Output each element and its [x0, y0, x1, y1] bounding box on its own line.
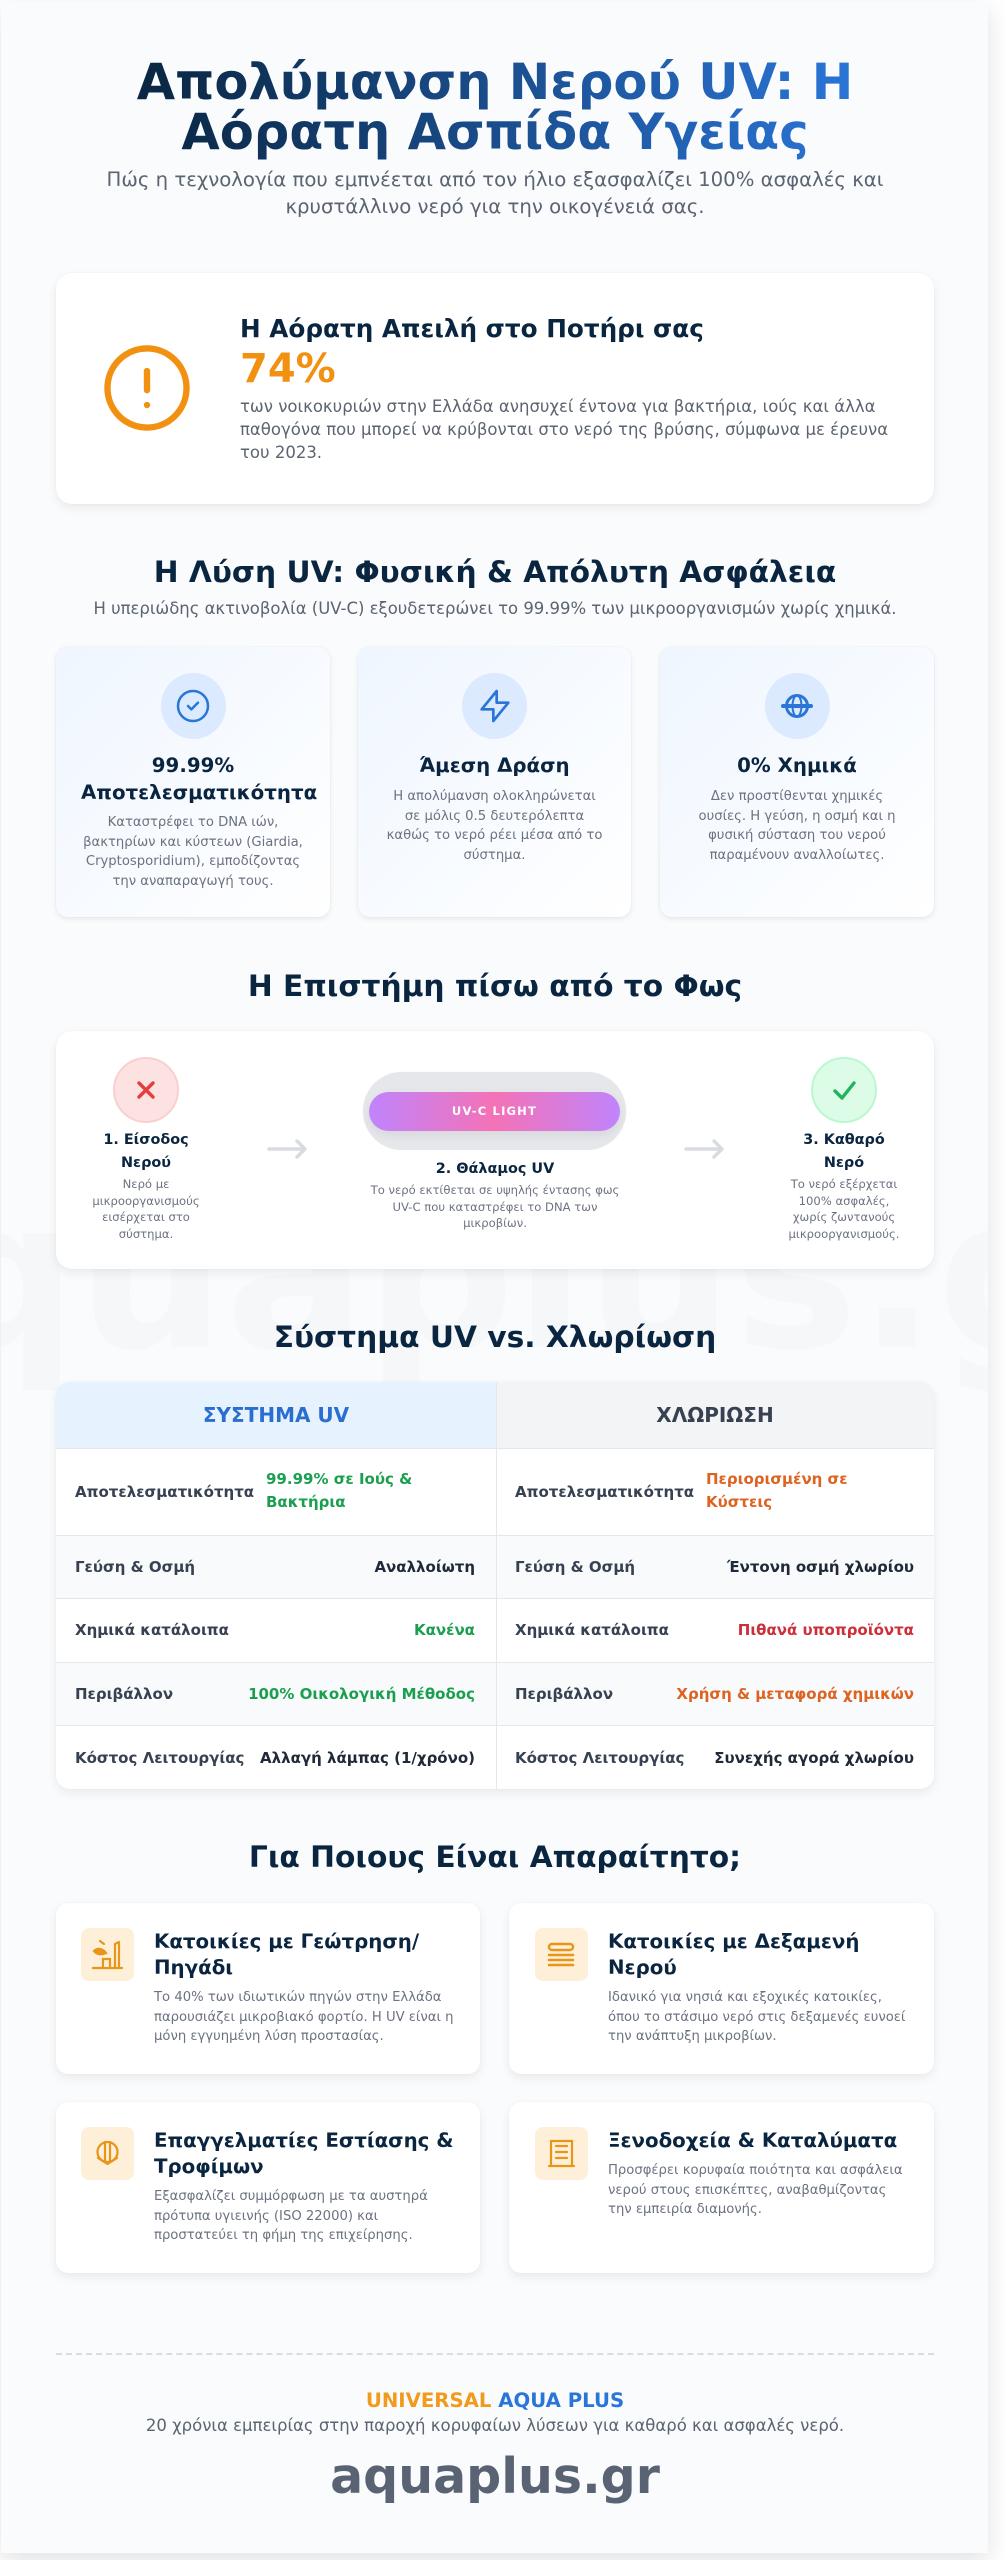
step text: μικροβίων.: [463, 1216, 527, 1230]
card text: [699, 789, 895, 863]
panel: effectiveness: [56, 647, 330, 917]
row: residues: Πιθανά υποπροϊόντα: [738, 1621, 914, 1639]
row: cost: [56, 1725, 934, 1789]
card text: φυσική σύσταση του νερού: [708, 828, 886, 843]
step text: 100% ασφαλές,: [799, 1194, 889, 1208]
comparison table: [56, 1382, 934, 1789]
icon: globe: [764, 673, 830, 739]
card text: Cryptosporidium), εμποδίζοντας: [86, 854, 300, 869]
column divider: [496, 1382, 497, 1789]
threat statistic: 74%: [240, 346, 336, 392]
row: effectiveness: Αποτελεσματικότητα: [515, 1483, 694, 1501]
icon: check circle: [160, 673, 226, 739]
uv lamp: UV-C LIGHT: [452, 1104, 537, 1118]
panel: zero chemicals: [660, 647, 934, 917]
card heading: Κατοικίες με Δεξαμενή: [608, 1930, 859, 1953]
step text: εισέρχεται στο: [102, 1210, 190, 1224]
card text: [608, 1990, 906, 2044]
row: effectiveness: [56, 1448, 934, 1535]
icon: cross: [113, 1057, 179, 1123]
step text: Το νερό εκτίθεται σε υψηλής έντασης φως: [371, 1183, 619, 1197]
subtitle: κρυστάλλινο νερό για την οικογένειά σας.: [285, 195, 705, 218]
step title: 1. Είσοδος: [103, 1132, 189, 1148]
card text: πρότυπα υγιεινής (ISO 22000) και: [154, 2209, 378, 2224]
subtitle: Πώς η τεχνολογία που εμπνέεται από τον ήλιο εξασφαλίζει 100% ασφαλές και: [107, 168, 883, 191]
row: residues: Κανένα: [414, 1621, 475, 1639]
step text: χωρίς ζωντανούς: [793, 1210, 895, 1224]
solution subtitle: Η υπεριώδης ακτινοβολία (UV-C) εξουδετερώνει το 99.99% των μικροοργανισμών χωρίς χημικά.: [93, 599, 897, 618]
row: cost: Κόστος Λειτουργίας: [75, 1749, 244, 1767]
card text: βακτηρίων και κύστεων (Giardia,: [83, 835, 303, 850]
step text: [370, 1183, 619, 1230]
uv lamp: [369, 1092, 620, 1131]
panel: threat: [56, 273, 934, 504]
card text: καθώς το νερό ρέει μέσα από το: [387, 828, 602, 843]
row: taste: [56, 1535, 934, 1598]
threat text: του 2023.: [240, 443, 322, 462]
step text: σύστημα.: [119, 1226, 173, 1240]
step text: μικροοργανισμούς: [92, 1194, 200, 1208]
icon: hotel: [535, 2127, 588, 2180]
card text: [608, 2163, 903, 2217]
card text: Δεν προστίθενται χημικές: [711, 789, 883, 804]
threat text: παθογόνα που μπορεί να κρύβονται στο νερό της βρύσης, σύμφωνα με έρευνα: [240, 420, 888, 439]
row: residues: Χημικά κατάλοιπα: [515, 1621, 669, 1639]
row: environment: [56, 1662, 934, 1725]
title: [137, 53, 853, 161]
footer website: aquaplus.gr: [330, 2448, 660, 2505]
row: cost: Συνεχής αγορά χλωρίου: [714, 1749, 914, 1767]
icon: warning: [104, 345, 190, 431]
card text: όπου το στάσιμο νερό στις δεξαμενές ευνοεί: [608, 2010, 905, 2025]
card text: [154, 2189, 428, 2243]
header: uv: [56, 1382, 496, 1448]
footer brand: UNIVERSAL AQUA PLUS: [366, 2389, 624, 2412]
icon: food: [81, 2127, 134, 2180]
card text: Καταστρέφει το DNA ιών,: [108, 815, 278, 830]
card text: [83, 815, 303, 889]
row: taste: Έντονη οσμή χλωρίου: [727, 1558, 914, 1576]
panel: hotels: [509, 2102, 934, 2273]
card text: νερού στους επισκέπτες, αναβαθμίζοντας: [608, 2183, 886, 2198]
footer divider: [56, 2353, 934, 2355]
card text: Ιδανικό για νησιά και εξοχικές κατοικίες,: [608, 1990, 882, 2005]
step 1: [92, 1057, 200, 1240]
card heading: [154, 2129, 454, 2178]
card heading: Επαγγελματίες Εστίασης &: [154, 2129, 454, 2152]
card text: [154, 1990, 453, 2044]
step 2: [363, 1072, 626, 1230]
row: environment: Περιβάλλον: [515, 1685, 613, 1703]
step title: [103, 1132, 189, 1171]
step title: 2. Θάλαμος UV: [436, 1161, 554, 1177]
card heading: 0% Χημικά: [737, 754, 857, 777]
threat text: των νοικοκυριών στην Ελλάδα ανησυχεί έντονα για βακτήρια, ιούς και άλλα: [240, 397, 876, 416]
card text: παραμένουν αναλλοίωτες.: [710, 848, 884, 863]
threat text: [240, 397, 888, 462]
icon: well: [81, 1928, 134, 1981]
card heading: Νερού: [608, 1956, 677, 1979]
panel: instant action: [358, 647, 631, 917]
heading: science: Η Επιστήμη πίσω από το Φως: [248, 969, 742, 1004]
icon: tank: [535, 1928, 588, 1981]
card text: την ανάπτυξη μικροβίων.: [608, 2029, 777, 2044]
row: residues: [56, 1598, 934, 1662]
card text: Η απολύμανση ολοκληρώνεται: [393, 789, 596, 804]
card heading: Αποτελεσματικότητα: [81, 781, 317, 804]
header: uv: ΣΥΣΤΗΜΑ UV: [203, 1403, 349, 1427]
card text: Το 40% των ιδιωτικών πηγών στην Ελλάδα: [154, 1990, 442, 2005]
header: chlorine: [496, 1382, 934, 1448]
step title: Νερό: [824, 1155, 864, 1171]
card text: σε μόλις 0.5 δευτερόλεπτα: [405, 809, 584, 824]
heading: comparison: Σύστημα UV vs. Χλωρίωση: [274, 1320, 716, 1355]
infographic page: Απολύμανση Νερού UV: Η: [137, 53, 853, 111]
infographic page: Αόρατη Ασπίδα Υγείας: [181, 103, 809, 161]
row: effectiveness: Βακτήρια: [266, 1493, 346, 1511]
row: environment: Περιβάλλον: [75, 1685, 173, 1703]
step title: Νερού: [121, 1155, 171, 1171]
panel: food professionals: [56, 2102, 480, 2273]
card text: παρουσιάζει μικροβιακό φορτίο. Η UV είναι η: [154, 2010, 453, 2025]
row: cost: Κόστος Λειτουργίας: [515, 1749, 684, 1767]
step text: UV-C που καταστρέφει το DNA των: [393, 1200, 597, 1214]
header: chlorine: ΧΛΩΡΙΩΣΗ: [656, 1403, 774, 1427]
row: effectiveness: Περιορισμένη σε: [706, 1470, 848, 1488]
card heading: Ξενοδοχεία & Καταλύματα: [608, 2129, 897, 2152]
card heading: 99.99%: [152, 754, 234, 777]
row: effectiveness: Κύστεις: [706, 1493, 772, 1511]
card text: ουσίες. Η γεύση, η οσμή και η: [699, 809, 895, 824]
row: residues: Χημικά κατάλοιπα: [75, 1621, 229, 1639]
panel: tanks: [509, 1903, 934, 2074]
card text: την αναπαραγωγή τους.: [112, 874, 274, 889]
card text: Προσφέρει κορυφαία ποιότητα και ασφάλεια: [608, 2163, 903, 2178]
card heading: [608, 1930, 859, 1979]
panel: wells: [56, 1903, 480, 2074]
step text: [92, 1177, 200, 1240]
row: taste: Αναλλοίωτη: [374, 1558, 475, 1576]
card heading: Άμεση Δράση: [419, 754, 570, 777]
row: effectiveness: 99.99% σε Ιούς &: [266, 1470, 412, 1488]
row: cost: Αλλαγή λάμπας (1/χρόνο): [260, 1749, 475, 1767]
arrow: [267, 1139, 307, 1159]
card text: Εξασφαλίζει συμμόρφωση με τα αυστηρά: [154, 2189, 428, 2204]
heading: audience: Για Ποιους Είναι Απαραίτητο;: [249, 1840, 741, 1875]
threat heading: Η Αόρατη Απειλή στο Ποτήρι σας: [240, 314, 704, 343]
card heading: Πηγάδι: [154, 1956, 233, 1979]
step text: μικροοργανισμούς.: [789, 1226, 899, 1240]
card text: την εμπειρία διαμονής.: [608, 2202, 762, 2217]
card text: [387, 789, 602, 863]
heading: solution: Η Λύση UV: Φυσική & Απόλυτη Ασφάλεια: [154, 555, 836, 590]
step text: Νερό με: [123, 1177, 169, 1191]
row: effectiveness: Αποτελεσματικότητα: [75, 1483, 254, 1501]
panel: process: [56, 1031, 934, 1269]
card heading: [81, 754, 317, 804]
row: taste: Γεύση & Οσμή: [515, 1558, 635, 1576]
row: environment: 100% Οικολογική Μέθοδος: [248, 1685, 475, 1703]
step text: [789, 1177, 899, 1240]
arrow: [684, 1139, 724, 1159]
uv chamber: [363, 1072, 626, 1150]
step title: 3. Καθαρό: [803, 1132, 885, 1148]
card text: προστατεύει τη φήμη της επιχείρησης.: [154, 2228, 413, 2243]
card text: μόνη εγγυημένη λύση προστασίας.: [154, 2029, 384, 2044]
row: taste: Γεύση & Οσμή: [75, 1558, 195, 1576]
icon: bolt: [462, 673, 527, 739]
subtitle: [107, 168, 883, 218]
card heading: Κατοικίες με Γεώτρηση/: [154, 1930, 419, 1953]
card heading: [154, 1930, 420, 1979]
card heading: Τροφίμων: [154, 2155, 264, 2178]
footer tagline: 20 χρόνια εμπειρίας στην παροχή κορυφαίων λύσεων για καθαρό και ασφαλές νερό.: [146, 2416, 844, 2435]
step title: [803, 1132, 885, 1171]
icon: check: [811, 1057, 877, 1123]
card text: σύστημα.: [464, 848, 525, 863]
step 3: [789, 1057, 899, 1240]
step text: Το νερό εξέρχεται: [791, 1177, 897, 1191]
row: environment: Χρήση & μεταφορά χημικών: [676, 1685, 914, 1703]
